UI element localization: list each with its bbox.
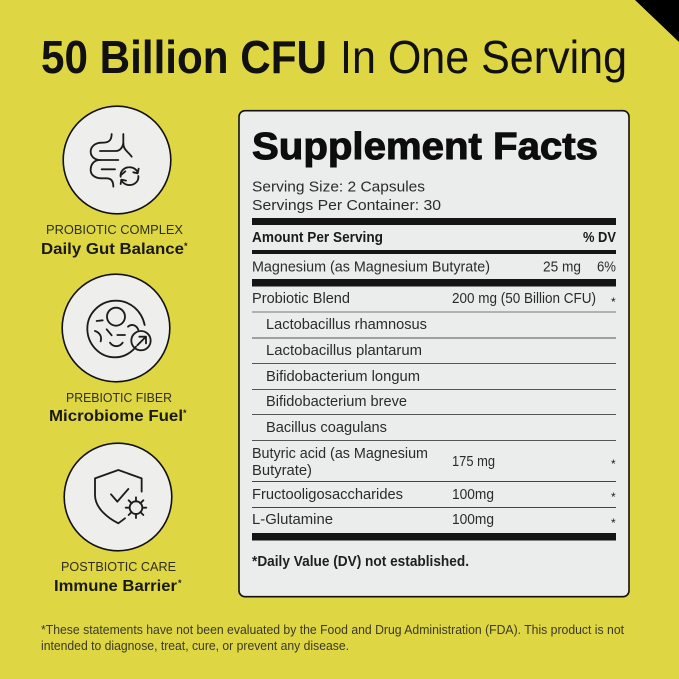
row: probiotic blend xyxy=(252,291,616,309)
benefit: postbiotic care xyxy=(54,443,182,595)
heading: Daily Gut Balance xyxy=(41,241,184,258)
row: butyric acid: Butyrate) xyxy=(252,463,312,479)
icon: shield with check and virus xyxy=(95,470,146,523)
row: bifidobacterium longum: Bifidobacterium longum xyxy=(266,369,420,385)
corner triangle xyxy=(635,0,679,42)
row: butyric acid xyxy=(252,446,616,479)
row: magnesium: 25 mg xyxy=(543,260,581,276)
row: magnesium: Magnesium (as Magnesium Butyrate) xyxy=(252,260,490,276)
serving info: Serving Size: 2 Capsules xyxy=(252,180,425,196)
footnote disclaimer: *These statements have not been evaluated by the Food and Drug Administration (FDA). This product is not xyxy=(41,623,625,637)
asterisk: * xyxy=(184,241,188,251)
daily value note: *Daily Value (DV) not established. xyxy=(252,554,469,570)
label: POSTBIOTIC CARE xyxy=(61,559,176,574)
title: 50 Billion CFU xyxy=(41,31,327,83)
serving info: Servings Per Container: 30 xyxy=(252,198,441,214)
panel heading: Supplement Facts xyxy=(252,126,598,168)
row: l-glutamine: * xyxy=(611,516,616,530)
title xyxy=(41,31,627,83)
row: probiotic blend: Probiotic Blend xyxy=(252,291,350,307)
table header: Amount Per Serving xyxy=(252,230,383,246)
icon: microbiome with up arrow xyxy=(87,301,151,357)
row: fructooligosaccharides: 100mg xyxy=(452,487,494,503)
asterisk: * xyxy=(183,408,187,418)
row: bifidobacterium breve: Bifidobacterium breve xyxy=(266,394,407,410)
row: magnesium xyxy=(252,260,616,276)
footnote disclaimer: intended to diagnose, treat, cure, or prevent any disease. xyxy=(41,639,349,653)
row: fructooligosaccharides xyxy=(252,487,616,504)
row: lactobacillus rhamnosus: Lactobacillus rhamnosus xyxy=(266,317,427,333)
label: PREBIOTIC FIBER xyxy=(66,390,172,405)
row: l-glutamine: 100mg xyxy=(452,512,494,528)
label: PROBIOTIC COMPLEX xyxy=(46,222,183,237)
row: bacillus coagulans: Bacillus coagulans xyxy=(266,420,387,436)
row: lactobacillus plantarum: Lactobacillus plantarum xyxy=(266,343,422,359)
row: probiotic blend: * xyxy=(611,295,616,309)
heading: Immune Barrier xyxy=(54,578,177,595)
row: butyric acid: 175 mg xyxy=(452,454,495,470)
heading: Microbiome Fuel xyxy=(49,408,183,425)
row: probiotic blend: 200 mg (50 Billion CFU) xyxy=(452,291,596,307)
row: l-glutamine xyxy=(252,512,616,530)
row: butyric acid: Butyric acid (as Magnesium xyxy=(252,446,428,462)
row: fructooligosaccharides: * xyxy=(611,490,616,504)
table header xyxy=(252,230,616,246)
footnote disclaimer xyxy=(41,623,625,653)
asterisk: * xyxy=(178,578,182,588)
title: In One Serving xyxy=(340,31,627,83)
benefit: probiotic complex xyxy=(41,106,188,258)
serving info xyxy=(252,180,441,214)
benefit: prebiotic fiber xyxy=(49,274,187,425)
icon: gut with refresh arrows xyxy=(91,134,139,187)
panel: supplement facts xyxy=(239,111,629,597)
row: fructooligosaccharides: Fructooligosaccharides xyxy=(252,487,403,503)
row: butyric acid: * xyxy=(611,457,616,471)
row: l-glutamine: L-Glutamine xyxy=(252,512,333,528)
table header: % DV xyxy=(583,230,616,246)
row: magnesium: 6% xyxy=(597,260,616,276)
